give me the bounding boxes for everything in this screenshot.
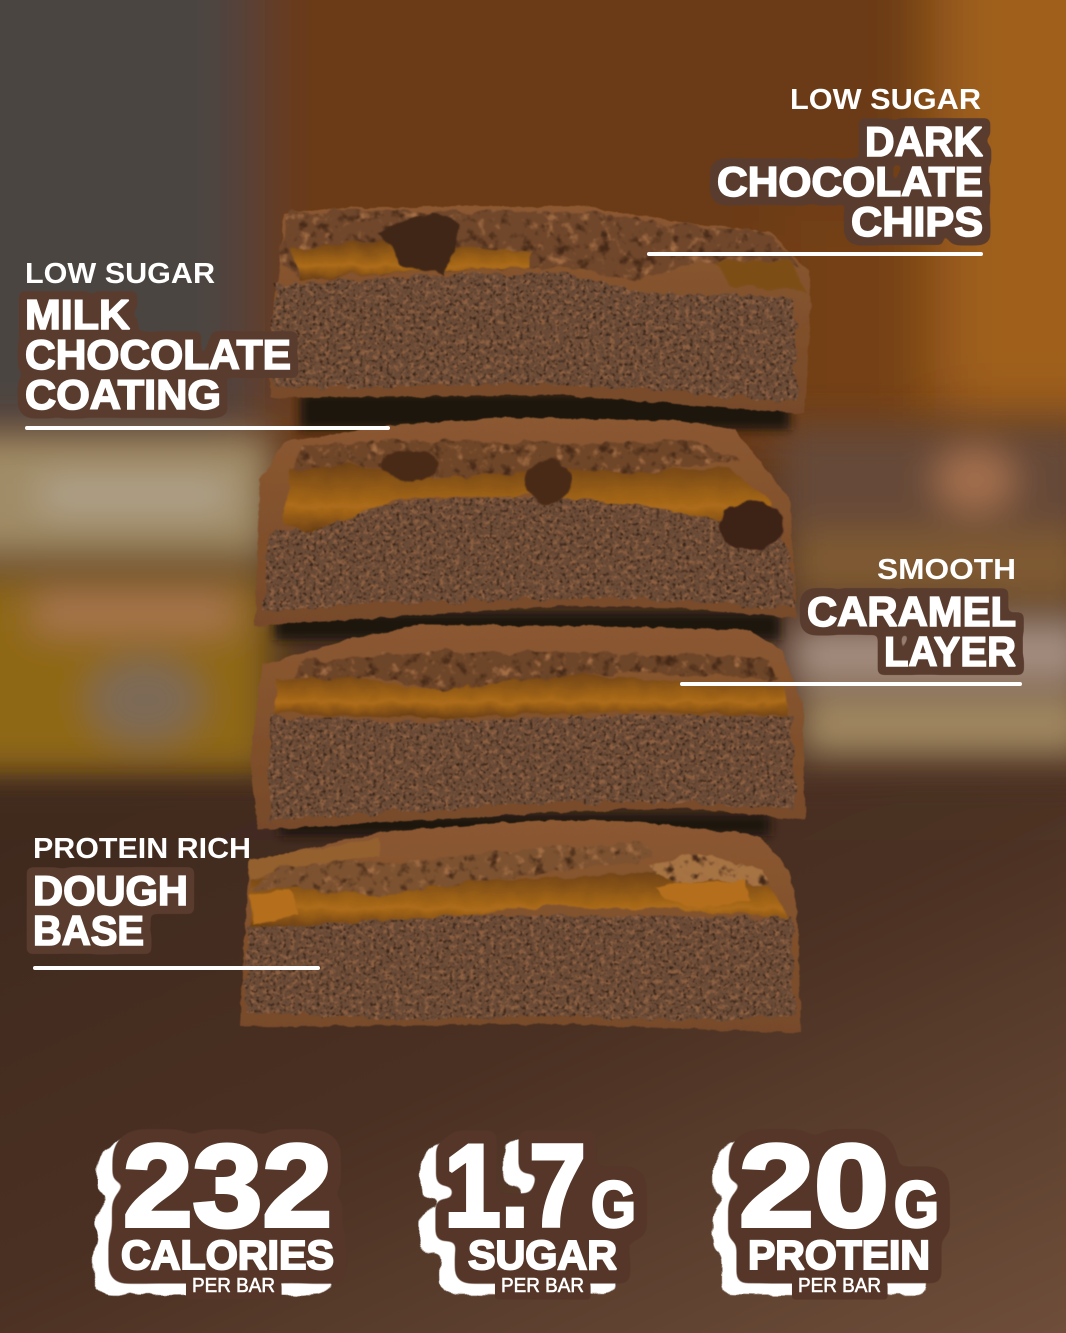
callout eyebrow: LOW SUGAR	[25, 258, 215, 290]
bar 2	[255, 418, 797, 626]
stat: 232 calories	[121, 1120, 334, 1297]
callout heading: CHOCOLATE	[717, 158, 983, 205]
shadows between bars	[275, 392, 790, 836]
callout heading	[717, 118, 983, 245]
callout eyebrow: LOW SUGAR	[790, 84, 981, 116]
bar 1 top	[270, 206, 811, 414]
leader line	[33, 966, 320, 970]
callout: protein rich dough base	[33, 833, 320, 970]
callout: milk chocolate coating	[25, 258, 390, 430]
callout heading: CHOCOLATE	[25, 331, 291, 378]
per bar note: PER BAR	[192, 1275, 275, 1297]
callout eyebrow: PROTEIN RICH	[33, 833, 251, 865]
stat number and unit: G	[591, 1167, 636, 1241]
bar 3	[250, 625, 805, 830]
leader line	[680, 682, 1022, 686]
stat number and unit: 20	[739, 1120, 889, 1251]
callout: smooth caramel layer	[680, 554, 1022, 686]
per bar note: PER BAR	[501, 1275, 584, 1297]
callout eyebrow: SMOOTH	[877, 554, 1016, 586]
stat number and unit: CALORIES	[121, 1232, 334, 1278]
callout heading	[807, 588, 1016, 675]
stat: 20g protein	[739, 1120, 939, 1297]
callout heading: BASE	[33, 907, 144, 954]
callout heading: MILK	[25, 291, 130, 338]
stat number and unit	[739, 1120, 939, 1278]
callout heading: LAYER	[884, 628, 1016, 675]
stat: 1.7g sugar	[444, 1120, 636, 1297]
leader line	[647, 252, 983, 256]
callout heading: DOUGH	[33, 867, 188, 914]
stat number and unit: 1.7	[444, 1120, 586, 1251]
leader line	[25, 426, 390, 430]
callout heading	[33, 867, 188, 954]
stat number and unit: PROTEIN	[748, 1232, 930, 1278]
callout heading: CARAMEL	[807, 588, 1016, 635]
stat number and unit: 232	[123, 1120, 332, 1251]
stat number and unit: SUGAR	[468, 1232, 617, 1278]
per bar note: PER BAR	[798, 1275, 881, 1297]
stat number and unit: G	[894, 1167, 939, 1241]
stack of four cut bars	[240, 206, 811, 1033]
callout heading: COATING	[25, 371, 221, 418]
callout heading: DARK	[865, 118, 983, 165]
callout heading: CHIPS	[851, 198, 983, 245]
callout: dark chocolate chips	[647, 84, 983, 256]
callout heading	[25, 291, 291, 418]
bar 4 bottom	[240, 820, 801, 1033]
